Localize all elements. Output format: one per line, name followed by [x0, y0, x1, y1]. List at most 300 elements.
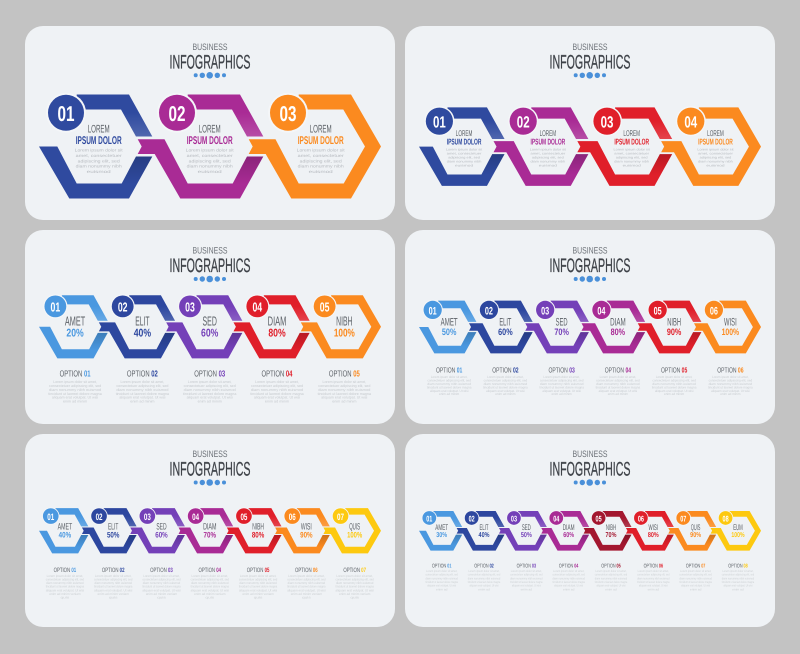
label and percent: 70%	[204, 530, 216, 539]
label and percent	[731, 523, 745, 539]
heading: BUSINESS	[192, 449, 228, 459]
option caption: OPTION 05	[661, 367, 687, 375]
link shape	[499, 511, 547, 551]
option caption: diam nonummy nibh euismod	[288, 581, 325, 585]
option caption: enim ad minim	[198, 400, 222, 404]
text block: adipiscing elit, sed	[616, 156, 648, 159]
option caption: aliquam erat volutpat. Ut wisi	[46, 588, 84, 592]
option caption: OPTION 04	[198, 567, 221, 574]
text block: diam nonummy nibh	[531, 160, 566, 163]
number badge: 08	[723, 514, 729, 523]
option caption: enim ad minim veniam	[98, 592, 129, 596]
label and percent	[268, 314, 286, 339]
option caption	[722, 563, 754, 591]
option caption	[94, 567, 133, 599]
text block: LOREM	[623, 129, 640, 138]
option caption	[679, 563, 712, 591]
label and percent: 50%	[521, 530, 532, 539]
label and percent: 90%	[667, 327, 681, 337]
option caption: consectetuer adipiscing elit, sed	[552, 573, 585, 576]
step 02	[99, 294, 175, 404]
label and percent: 60%	[201, 326, 218, 339]
option caption: enim ad minim	[332, 400, 356, 404]
option caption: diam nonummy nibh euismod	[652, 382, 696, 386]
number badge: 03	[185, 300, 195, 315]
option caption: tincidunt ut laoreet dolore magna	[46, 585, 84, 589]
link shape	[138, 94, 263, 198]
label and percent	[610, 316, 626, 337]
number badge: 02	[517, 113, 530, 131]
text block: LOREM	[540, 129, 556, 138]
option caption: consectetuer adipiscing elit, sed	[336, 578, 374, 581]
text block: diam nonummy nibh	[187, 164, 234, 169]
text block: IPSUM DOLOR	[76, 135, 122, 147]
option caption: Lorem ipsum dolor sit amet,	[143, 574, 180, 578]
text block	[186, 124, 235, 174]
option caption: Lorem ipsum dolor sit amet,	[638, 569, 669, 573]
label and percent	[435, 523, 448, 539]
option caption: enim ad	[563, 588, 574, 591]
option caption: quis	[350, 595, 359, 599]
option caption: enim ad minim	[608, 393, 628, 396]
option caption: diam nonummy nibh euismod	[49, 388, 101, 392]
option caption: enim ad minim veniam	[242, 592, 274, 596]
option caption: diam nonummy nibh euismod	[94, 581, 132, 585]
label and percent	[722, 316, 739, 337]
heading: BUSINESS	[192, 246, 228, 256]
label and percent: ELIT	[135, 314, 150, 328]
label and percent	[667, 316, 681, 337]
label and percent: DIAM	[268, 314, 286, 328]
step 01	[39, 294, 108, 404]
link shape	[469, 301, 533, 353]
label and percent: ELIT	[480, 523, 489, 532]
option caption: consectetuer adipiscing elit, sed	[184, 384, 236, 388]
option caption: enim ad	[732, 588, 744, 591]
option caption: aliquam erat volutpat. Ut wisi	[655, 389, 693, 393]
text block: LOREM	[199, 124, 221, 136]
text block: amet, consectetuer	[698, 151, 733, 155]
number badge: 02	[118, 300, 128, 315]
option caption: OPTION 01	[60, 369, 91, 379]
heading: INFOGRAPHICS	[170, 255, 250, 277]
link shape	[419, 511, 462, 551]
link shape	[166, 295, 242, 358]
label and percent: 100%	[347, 530, 362, 539]
number badge: 05	[596, 514, 602, 523]
option caption: tincidunt ut laoreet dolore magna	[596, 386, 640, 389]
option caption: aliquam erat volutpat. Ut wisi	[542, 389, 581, 393]
label and percent: WISI	[649, 523, 658, 532]
option caption: OPTION 05	[247, 567, 269, 574]
option caption: enim ad minim	[552, 393, 572, 396]
label and percent	[648, 523, 659, 539]
option caption: aliquam erat volutpat. Ut wisi	[336, 588, 374, 592]
option caption: aliquam erat volutpat. Ut wisi	[599, 389, 637, 393]
label and percent: NIBH	[252, 521, 264, 532]
option caption: diam nonummy nibh euismod	[46, 581, 84, 585]
number badge: 03	[601, 113, 613, 131]
option caption: tincidunt ut laoreet dolore magna	[679, 580, 712, 584]
option caption: aliquam erat volutpat. Ut wisi	[287, 588, 326, 592]
number badge: 01	[433, 113, 446, 131]
step 03	[499, 510, 547, 591]
label and percent: NIBH	[667, 316, 681, 328]
label and percent: 30%	[436, 530, 447, 539]
option caption: tincidunt ut laoreet dolore magna	[250, 392, 304, 396]
option caption: Lorem ipsum dolor sit amet,	[543, 375, 580, 379]
option caption: tincidunt ut laoreet dolore magna	[652, 386, 697, 389]
heading: INFOGRAPHICS	[550, 51, 630, 73]
panel: three steps	[25, 26, 395, 220]
label and percent	[521, 523, 532, 539]
number badge: 07	[680, 514, 686, 523]
label and percent: 70%	[554, 327, 569, 337]
number badge: 06	[638, 514, 644, 523]
number badge: 02	[96, 512, 103, 522]
label and percent	[554, 316, 569, 337]
option caption: enim ad minim veniam	[291, 592, 322, 596]
label and percent: ELIT	[108, 521, 118, 532]
label and percent	[690, 523, 701, 539]
heading	[170, 42, 250, 79]
link shape	[661, 107, 761, 186]
number badge: 04	[684, 113, 697, 131]
option caption: diam nonummy nibh euismod	[184, 388, 236, 392]
step 02	[469, 300, 533, 396]
option caption: OPTION 08	[728, 563, 748, 569]
option caption: Lorem ipsum dolor sit amet,	[595, 569, 627, 573]
label and percent: ELIT	[499, 316, 511, 328]
label and percent: SED	[203, 314, 217, 328]
option caption: diam nonummy nibh euismod	[191, 581, 228, 585]
text block: euismod	[623, 164, 642, 167]
step 06	[275, 507, 330, 599]
label and percent: 100%	[731, 530, 745, 539]
option caption: diam nonummy nibh euismod	[510, 577, 543, 580]
label and percent: 70%	[606, 530, 616, 539]
text block: adipiscing elit, sed	[448, 156, 481, 159]
link shape	[275, 508, 330, 553]
option caption: diam nonummy nibh euismod	[540, 382, 584, 386]
label and percent	[606, 523, 616, 539]
option caption	[191, 567, 229, 599]
option caption: aliquam erat volutpat. Ut wisi	[427, 584, 456, 587]
text block: IPSUM DOLOR	[187, 135, 233, 147]
label and percent	[334, 314, 355, 339]
option caption	[427, 367, 472, 396]
option caption	[595, 563, 627, 591]
option caption: tincidunt ut laoreet dolore magna	[637, 580, 670, 584]
option caption: Lorem ipsum dolor sit amet,	[468, 569, 500, 573]
option caption: Lorem ipsum dolor sit amet,	[47, 574, 83, 578]
number badge: 01	[47, 512, 54, 522]
step chain	[39, 507, 381, 599]
option caption	[596, 367, 640, 396]
heading: BUSINESS	[572, 246, 608, 256]
label and percent: DIAM	[203, 521, 216, 532]
label and percent	[58, 521, 72, 539]
text block: adipiscing elit, sed	[78, 158, 121, 163]
text block: euismod	[539, 164, 558, 167]
text block: Lorem ipsum dolor sit	[75, 148, 124, 152]
option caption: aliquam erat volutpat. Ut wisi	[512, 584, 541, 587]
option caption: OPTION 05	[601, 563, 621, 569]
text block: LOREM	[310, 124, 332, 136]
text block: IPSUM DOLOR	[698, 138, 733, 147]
option caption: consectetuer adipiscing elit, sed	[722, 573, 754, 576]
text block: amet, consectetuer	[298, 153, 344, 158]
label and percent	[563, 523, 575, 539]
text block: euismod	[198, 169, 223, 174]
step 04	[541, 510, 589, 591]
option caption: enim ad minim	[664, 393, 684, 396]
option caption: OPTION 02	[474, 563, 494, 569]
option caption: OPTION 02	[102, 567, 124, 574]
option caption: consectetuer adipiscing elit, sed	[142, 578, 181, 581]
link shape	[39, 508, 88, 553]
text block: Lorem ipsum dolor sit	[697, 147, 734, 151]
text block: Lorem ipsum dolor sit	[446, 147, 483, 151]
link shape	[668, 511, 716, 551]
text block: amet, consectetuer	[187, 153, 233, 158]
option caption: diam nonummy nibh euismod	[484, 382, 527, 386]
option caption: aliquam erat volutpat. Ut wisi	[239, 588, 277, 592]
label and percent	[441, 316, 458, 337]
option caption: enim ad minim veniam	[146, 592, 177, 596]
label and percent: QUIS	[691, 523, 700, 532]
step chain	[39, 294, 381, 404]
option caption: Lorem ipsum dolor sit amet,	[487, 375, 524, 379]
option caption: aliquam erat volutpat. Ut wisi	[94, 588, 132, 592]
label and percent: 20%	[66, 326, 84, 339]
label and percent: 100%	[334, 326, 355, 339]
option caption: consectetuer adipiscing elit, sed	[595, 573, 627, 576]
option caption: diam nonummy nibh euismod	[239, 581, 277, 585]
option caption: Lorem ipsum dolor sit amet,	[336, 574, 373, 578]
step 03	[249, 93, 381, 198]
link shape	[82, 508, 137, 553]
option caption: enim ad minim	[265, 400, 289, 404]
label and percent: NIBH	[336, 314, 353, 328]
number badge: 03	[144, 512, 151, 522]
option caption: tincidunt ut laoreet dolore magna	[722, 580, 754, 584]
option caption: OPTION 01	[432, 563, 451, 569]
option caption: Lorem ipsum dolor sit amet,	[240, 574, 276, 578]
option caption: enim ad minim veniam	[49, 592, 81, 596]
option caption: enim ad minim	[495, 393, 516, 396]
option caption: enim ad	[605, 588, 617, 591]
option caption: consectetuer adipiscing elit, sed	[287, 578, 326, 581]
heading	[170, 449, 250, 486]
text block: diam nonummy nibh	[76, 164, 123, 169]
option caption	[318, 369, 371, 404]
option caption: consectetuer adipiscing elit, sed	[484, 379, 527, 382]
option caption: OPTION 02	[127, 369, 158, 379]
option caption: tincidunt ut laoreet dolore magna	[336, 585, 374, 589]
panel: eight steps	[405, 434, 775, 627]
option caption: Lorem ipsum dolor sit amet,	[722, 569, 754, 573]
option caption: consectetuer adipiscing elit, sed	[49, 384, 101, 388]
text block: LOREM	[456, 129, 472, 138]
option caption	[48, 369, 102, 404]
label and percent: 40%	[479, 530, 489, 539]
option caption: consectetuer adipiscing elit, sed	[540, 379, 584, 382]
option caption: consectetuer adipiscing elit, sed	[709, 379, 752, 382]
text block: adipiscing elit, sed	[532, 156, 564, 159]
label and percent: 80%	[611, 327, 625, 337]
number badge: 06	[710, 305, 718, 317]
text block: euismod	[309, 169, 334, 174]
heading: INFOGRAPHICS	[550, 458, 630, 480]
option caption: Lorem ipsum dolor sit amet,	[656, 375, 692, 379]
option caption: aliquam erat volutpat. Ut wisi	[681, 584, 710, 587]
step 01	[39, 507, 88, 599]
text block: euismod	[87, 169, 112, 174]
label and percent	[107, 521, 119, 539]
option caption: aliquam erat volutpat. Ut wisi	[723, 584, 753, 587]
label and percent: 60%	[155, 530, 168, 539]
text block	[297, 124, 346, 174]
text block: LOREM	[707, 129, 724, 138]
option caption: aliquam erat volutpat. Ut wisi	[430, 389, 468, 393]
panel: four steps	[405, 26, 775, 220]
label and percent: 80%	[648, 530, 659, 539]
label and percent: DIAM	[563, 523, 575, 532]
option caption: Lorem ipsum dolor sit amet,	[431, 375, 467, 379]
link shape	[584, 511, 631, 551]
number badge: 04	[192, 512, 199, 522]
option caption: Lorem ipsum dolor sit amet,	[600, 375, 636, 379]
number badge: 07	[337, 512, 344, 522]
link shape	[711, 511, 761, 551]
link shape	[626, 511, 674, 551]
option caption: tincidunt ut laoreet dolore magna	[287, 585, 326, 589]
number badge: 04	[553, 514, 559, 523]
option caption: OPTION 06	[717, 367, 744, 375]
number badge: 01	[429, 305, 437, 317]
text block	[614, 129, 651, 167]
option caption: consectetuer adipiscing elit, sed	[191, 578, 229, 581]
link shape	[323, 508, 381, 553]
option caption: consectetuer adipiscing elit, sed	[679, 573, 712, 576]
option caption	[483, 367, 528, 396]
link shape	[233, 295, 310, 358]
heading: INFOGRAPHICS	[550, 255, 630, 277]
option caption: tincidunt ut laoreet dolore magna	[427, 386, 472, 389]
option caption: tincidunt ut laoreet dolore magna	[552, 580, 585, 584]
heading: INFOGRAPHICS	[170, 51, 250, 73]
text block: adipiscing elit, sed	[700, 156, 732, 159]
step 05	[584, 510, 631, 591]
option caption: aliquam erat volutpat. Ut wisi	[191, 588, 229, 592]
number badge: 05	[320, 300, 329, 315]
label and percent: 60%	[498, 327, 513, 337]
label and percent	[347, 521, 362, 539]
option caption: diam nonummy nibh euismod	[425, 577, 458, 580]
number badge: 02	[168, 102, 186, 126]
link shape	[419, 107, 505, 186]
heading: BUSINESS	[192, 42, 228, 52]
option caption: tincidunt ut laoreet dolore magna	[48, 392, 102, 396]
step chain	[419, 300, 761, 396]
step 03	[166, 294, 242, 404]
number badge: 06	[289, 512, 296, 522]
option caption: consectetuer adipiscing elit, sed	[318, 384, 370, 388]
step 01	[419, 300, 476, 396]
label and percent: AMET	[65, 314, 85, 328]
label and percent: 100%	[722, 327, 739, 337]
step 02	[82, 507, 137, 599]
option caption: Lorem ipsum dolor sit amet,	[680, 569, 711, 573]
option caption: quis	[254, 595, 263, 599]
option caption: diam nonummy nibh euismod	[251, 388, 303, 392]
step 05	[227, 507, 281, 599]
number badge: 05	[240, 512, 247, 522]
option caption	[142, 567, 181, 599]
option caption: tincidunt ut laoreet dolore magna	[468, 580, 500, 584]
number badge: 01	[58, 102, 75, 126]
option caption: consectetuer adipiscing elit, sed	[94, 578, 132, 581]
step 03	[130, 507, 185, 599]
option caption: tincidunt ut laoreet dolore magna	[708, 386, 753, 389]
label and percent: 60%	[563, 530, 574, 539]
option caption: tincidunt ut laoreet dolore magna	[425, 580, 458, 584]
text block: adipiscing elit, sed	[189, 158, 232, 163]
option caption	[239, 567, 278, 599]
option caption	[539, 367, 584, 396]
option caption: diam nonummy nibh euismod	[596, 382, 640, 386]
label and percent	[65, 314, 85, 339]
option caption: OPTION 06	[295, 567, 318, 574]
option caption: aliquam erat volutpat. Ut wisi	[639, 584, 668, 587]
label and percent: AMET	[435, 523, 448, 532]
option caption: Lorem ipsum dolor sit amet,	[511, 569, 542, 573]
link shape	[39, 295, 108, 358]
step 05	[301, 294, 381, 404]
option caption: consectetuer adipiscing elit, sed	[251, 384, 303, 388]
option caption: aliquam erat volutpat. Ut wisi	[119, 396, 165, 400]
panel: five steps	[25, 230, 395, 424]
label and percent: QUIS	[349, 521, 360, 532]
option caption: diam nonummy nibh euismod	[709, 382, 752, 386]
text block: IPSUM DOLOR	[447, 138, 481, 147]
text block: amet, consectetuer	[531, 151, 566, 155]
option caption: tincidunt ut laoreet dolore magna	[318, 392, 371, 396]
option caption: diam nonummy nibh euismod	[336, 581, 373, 585]
option caption: diam nonummy nibh euismod	[143, 581, 180, 585]
text block: diam nonummy nibh	[447, 160, 482, 163]
option caption: diam nonummy nibh euismod	[722, 577, 754, 580]
step 06	[626, 510, 674, 591]
option caption: aliquam erat volutpat. Ut wisi	[554, 584, 583, 587]
step 04	[233, 294, 310, 404]
link shape	[638, 301, 701, 353]
label and percent: WISI	[724, 316, 737, 328]
number badge: 04	[252, 300, 262, 315]
option caption: aliquam erat volutpat. Ut wisi	[142, 588, 181, 592]
text block: IPSUM DOLOR	[531, 138, 565, 147]
option caption: enim ad minim	[720, 393, 741, 396]
option caption: quis	[157, 595, 166, 599]
link shape	[494, 107, 588, 186]
label and percent: 90%	[300, 530, 313, 539]
option caption	[183, 369, 237, 404]
option caption: enim ad minim	[130, 400, 155, 404]
panel: seven steps	[25, 434, 395, 627]
label and percent: 40%	[59, 530, 71, 539]
text block: amet, consectetuer	[76, 153, 122, 158]
